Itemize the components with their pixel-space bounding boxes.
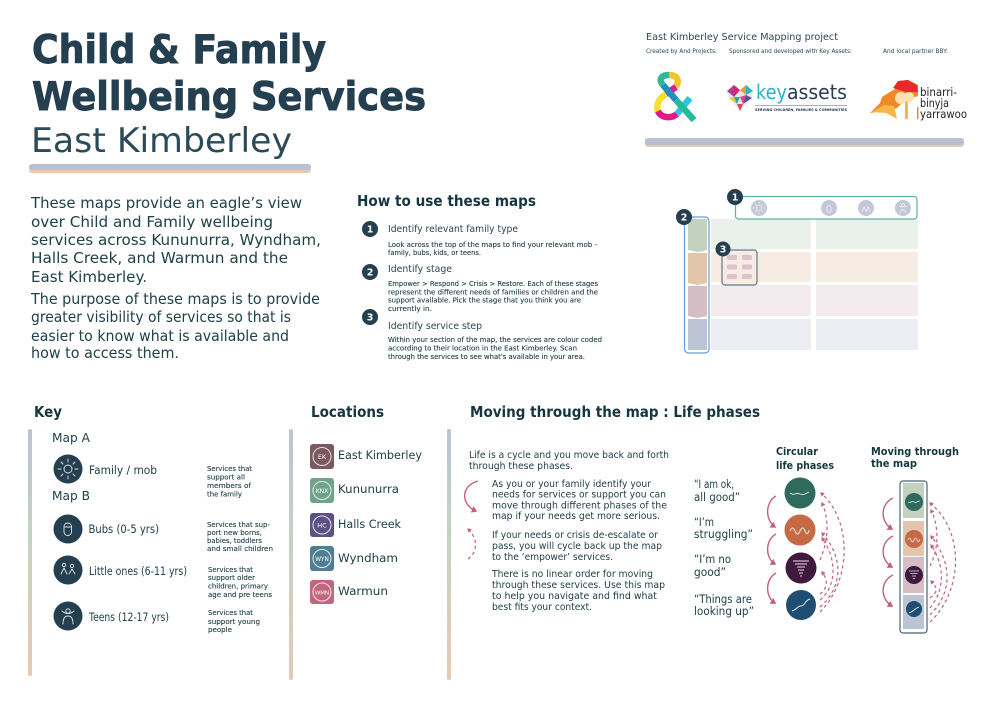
logo: Key Assets <box>727 80 848 112</box>
life phases text <box>469 450 669 613</box>
dashed arrows <box>820 493 844 612</box>
logo: Key Assets: assets <box>787 80 847 104</box>
phase icon: struggling <box>784 514 816 546</box>
life phases text: best fits your context. <box>492 602 592 613</box>
life phases text: pass, you will cycle back up the map <box>492 541 662 552</box>
key: bubs: Bubs (0-5 yrs) <box>88 523 159 536</box>
quotes: struggling” <box>694 527 753 541</box>
quotes: “Things are <box>694 592 752 606</box>
intro text: services across Kununurra, Wyndham, <box>31 232 321 249</box>
logo: Binarri-binyja Yarrawoo: yarrawoo <box>920 107 967 121</box>
key: bubs: Services that sup- <box>207 520 270 529</box>
map diagram <box>676 189 918 353</box>
location: Warmun: WMN <box>315 590 329 596</box>
stage column <box>676 209 709 353</box>
location: East Kimberley <box>310 444 422 469</box>
quotes <box>694 477 754 618</box>
step 2: Identify stage <box>388 264 452 275</box>
heading: life phases: Moving through the map : Life phases <box>470 403 760 421</box>
project credits: Sponsored and developed with Key Assets: <box>729 47 852 55</box>
solid arrows <box>768 496 776 603</box>
intro text: over Child and Family wellbeing <box>31 214 273 231</box>
location: Wyndham: WYN <box>315 557 329 563</box>
heading: moving: the map <box>871 457 917 470</box>
key panel: Map B <box>52 489 90 503</box>
life phases text: map if your needs get more serious. <box>492 511 660 522</box>
location: Halls Creek <box>310 513 402 537</box>
key: bubs: port new borns, <box>207 528 262 537</box>
moving through the map <box>871 445 959 633</box>
step 2: Empower > Respond > Crisis > Restore. Each of these stages <box>388 279 598 288</box>
key: little ones: age and pre teens <box>208 590 272 599</box>
step 3: Within your section of the map, the services are colour coded <box>388 335 602 344</box>
step 3: according to their location in the East Kimberley. Scan <box>388 344 577 352</box>
location: Wyndham: Wyndham <box>338 552 398 565</box>
small phase icons <box>905 493 923 617</box>
step 2 <box>362 264 598 313</box>
title underline <box>29 164 311 173</box>
logo: Binarri-binyja Yarrawoo: binyja <box>920 96 949 110</box>
intro text: East Kimberley. <box>31 269 147 286</box>
step 2: 2 <box>367 268 373 278</box>
step 1: Identify relevant family type <box>388 224 518 235</box>
location: Kununurra: KNX <box>316 488 328 495</box>
life phases text: As you or your family identify your <box>492 479 651 490</box>
key: teens: Teens (12-17 yrs) <box>88 611 169 624</box>
quotes: “I am ok, <box>694 477 734 491</box>
intro text: These maps provide an eagle’s view <box>30 195 302 212</box>
dashed arrows <box>930 503 956 622</box>
step 1 <box>362 221 597 257</box>
location: Kununurra: Kununurra <box>338 483 399 496</box>
heading: circular: life phases <box>776 459 834 472</box>
column frame <box>900 481 927 633</box>
key: little ones: support older <box>208 573 256 582</box>
location: Wyndham <box>310 546 398 571</box>
key: little ones <box>54 556 272 599</box>
heading: moving <box>871 445 959 470</box>
how to steps <box>362 221 602 361</box>
step 1: family, bubs, kids, or teens. <box>388 248 481 257</box>
title <box>31 28 426 161</box>
key: teens: support young <box>208 617 260 626</box>
family type bar: 1 <box>732 192 738 204</box>
quotes: looking up” <box>694 604 754 618</box>
life phases text: to the ‘empower’ services. <box>492 552 613 563</box>
title: Wellbeing Services <box>32 75 426 120</box>
key panel <box>52 431 273 634</box>
key: family: support all <box>207 472 245 482</box>
step 2: currently in. <box>388 304 432 313</box>
step 3: through the services to see what's available in your area. <box>388 352 585 361</box>
step 1: Look across the top of the maps to find your relevant mob - <box>388 240 597 249</box>
service step box <box>716 242 757 285</box>
key: bubs <box>54 514 273 553</box>
logo: Key Assets: key <box>756 80 787 104</box>
life phases text: to help you navigate and find what <box>492 591 657 602</box>
key: teens: people <box>208 625 232 634</box>
location: East Kimberley: EK <box>318 453 327 461</box>
life phases text: through these services. Use this map <box>492 580 665 591</box>
heading: moving: Moving through <box>871 445 959 458</box>
key: little ones: Little ones (6-11 yrs) <box>89 565 187 578</box>
solid arrows <box>883 498 893 606</box>
step 2: support available. Pick the stage that you think you are <box>388 296 581 304</box>
key: family: Services that <box>207 464 252 473</box>
key: teens: Services that <box>208 608 253 617</box>
step 3 <box>362 309 602 361</box>
project credits: Created by And Projects: <box>646 47 717 55</box>
intro text: Halls Creek, and Warmun and the <box>31 250 288 267</box>
step 2: represent the different needs of families or children and the <box>388 288 598 296</box>
location: East Kimberley: East Kimberley <box>338 449 422 462</box>
rows <box>711 219 918 350</box>
divider bars <box>28 429 451 680</box>
project credits: And local partner BBY: <box>883 47 948 55</box>
life phases text: move through different phases of the <box>492 500 667 512</box>
heading: key: Key <box>34 403 62 421</box>
quotes: good” <box>694 565 726 579</box>
intro text: greater visibility of services so that is <box>31 309 291 326</box>
intro text: how to access them. <box>31 345 179 362</box>
location: Warmun: Warmun <box>338 585 388 598</box>
life phases text: needs for services or support you can <box>492 490 666 500</box>
life phases text: If your needs or crisis de-escalate or <box>492 530 658 541</box>
intro text <box>30 195 321 362</box>
logo: Binarri-binyja Yarrawoo: binarri- <box>920 85 957 99</box>
key: family: Family / mob <box>89 464 157 477</box>
location: Halls Creek: HC <box>317 522 327 530</box>
key: little ones: Services that <box>208 565 253 574</box>
arrow: dashed legend <box>468 529 476 559</box>
project credits <box>646 32 948 55</box>
key: family: members of <box>207 481 251 490</box>
project credits: East Kimberley Service Mapping project <box>646 32 838 43</box>
heading: locations: Locations <box>311 403 384 421</box>
intro text: easier to know what is available and <box>31 328 289 345</box>
phase icon: looking up <box>786 590 816 620</box>
heading: circular <box>776 445 834 472</box>
key panel: Map A <box>52 431 91 445</box>
stage column: 2 <box>681 212 687 224</box>
service step box: 3 <box>720 244 726 256</box>
locations list <box>310 444 422 604</box>
logo: And Projects ampersand <box>657 75 694 120</box>
quotes: “I’m no <box>694 552 731 566</box>
life phases text: through these phases. <box>469 461 573 472</box>
quotes: all good” <box>694 490 740 504</box>
key: teens <box>54 602 260 634</box>
phase icon: ok <box>784 478 816 508</box>
key: family <box>54 454 252 498</box>
heading: circular: Circular <box>776 445 818 458</box>
logo: Key Assets: SERVING CHILDREN, FAMILIES & COMMUNITIES <box>755 108 848 112</box>
family type bar <box>727 189 917 219</box>
location: Kununurra <box>310 478 399 503</box>
arrow: solid legend <box>465 481 478 511</box>
step 3: Identify service step <box>388 321 482 332</box>
key: bubs: and small children <box>207 544 273 553</box>
location: Warmun <box>310 580 388 604</box>
heading: how to use: How to use these maps <box>357 192 536 210</box>
circular life phases <box>768 445 844 620</box>
key: bubs: babies, toddlers <box>207 536 262 545</box>
intro text: The purpose of these maps is to provide <box>30 291 320 308</box>
logo: Binarri-binyja Yarrawoo <box>870 80 967 121</box>
title: Child & Family <box>32 28 326 73</box>
phase icon: crisis <box>786 552 816 584</box>
location: Halls Creek: Halls Creek <box>338 518 402 531</box>
quotes: “I’m <box>694 515 714 529</box>
key: little ones: children, primary <box>208 582 269 590</box>
step 3: 3 <box>367 312 373 324</box>
key: family: the family <box>207 490 243 498</box>
title: East Kimberley <box>31 121 292 161</box>
header underline right <box>645 138 964 147</box>
life phases text: Life is a cycle and you move back and forth <box>469 450 669 461</box>
life phases text: There is no linear order for moving <box>491 569 653 580</box>
step 1: 1 <box>367 224 373 236</box>
